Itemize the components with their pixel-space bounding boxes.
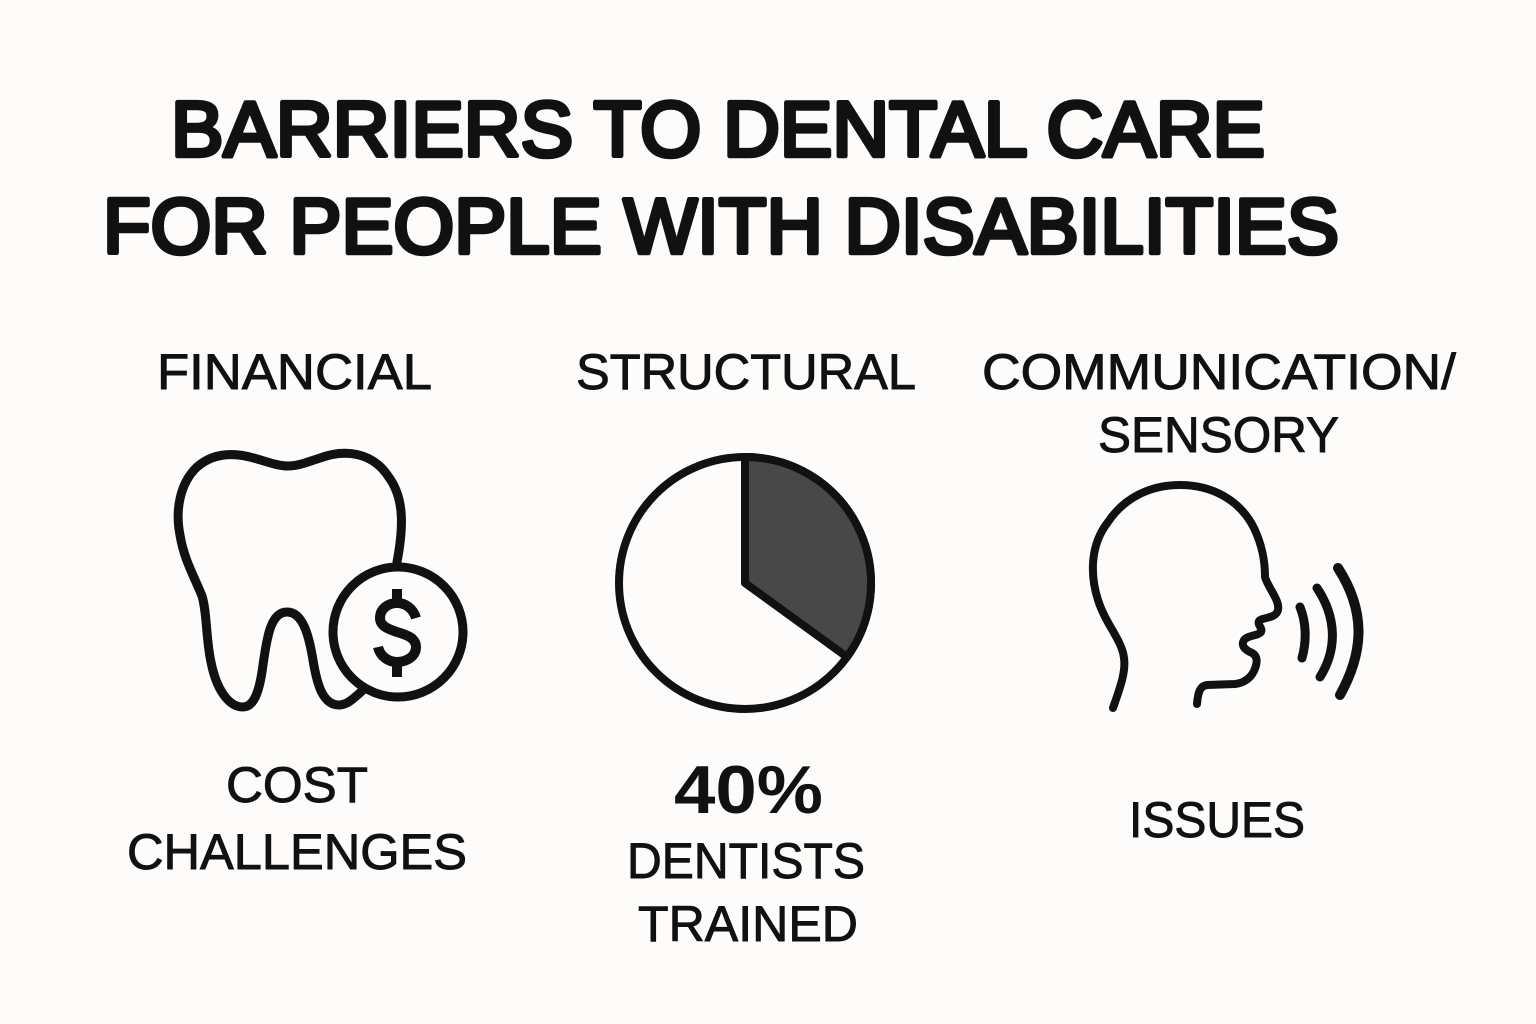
- icon: tooth with dollar coin: [178, 453, 463, 707]
- label: dentists trained: TRAINED: [638, 896, 858, 952]
- label: issues: ISSUES: [1129, 792, 1305, 848]
- label: cost challenges: [127, 757, 467, 880]
- icon: speaking head: [1093, 485, 1359, 708]
- label: dentists trained: DENTISTS: [627, 833, 865, 889]
- heading: communication/sensory: SENSORY: [1098, 407, 1339, 463]
- label: dentists trained: [627, 833, 865, 952]
- label: cost challenges: COST: [226, 757, 368, 813]
- heading: structural: STRUCTURAL: [576, 344, 916, 400]
- title: FOR PEOPLE WITH DISABILITIES: [103, 182, 1339, 270]
- heading: communication/sensory: COMMUNICATION/: [982, 344, 1456, 400]
- label: cost challenges: CHALLENGES: [127, 824, 467, 880]
- stat: 40%: 40%: [674, 752, 823, 828]
- pie chart: 40% dentists trained: [619, 457, 871, 709]
- heading: communication/sensory: [982, 344, 1456, 463]
- title: BARRIERS TO DENTAL CARE: [171, 85, 1265, 173]
- title: [103, 85, 1339, 270]
- heading: financial: FINANCIAL: [157, 344, 432, 400]
